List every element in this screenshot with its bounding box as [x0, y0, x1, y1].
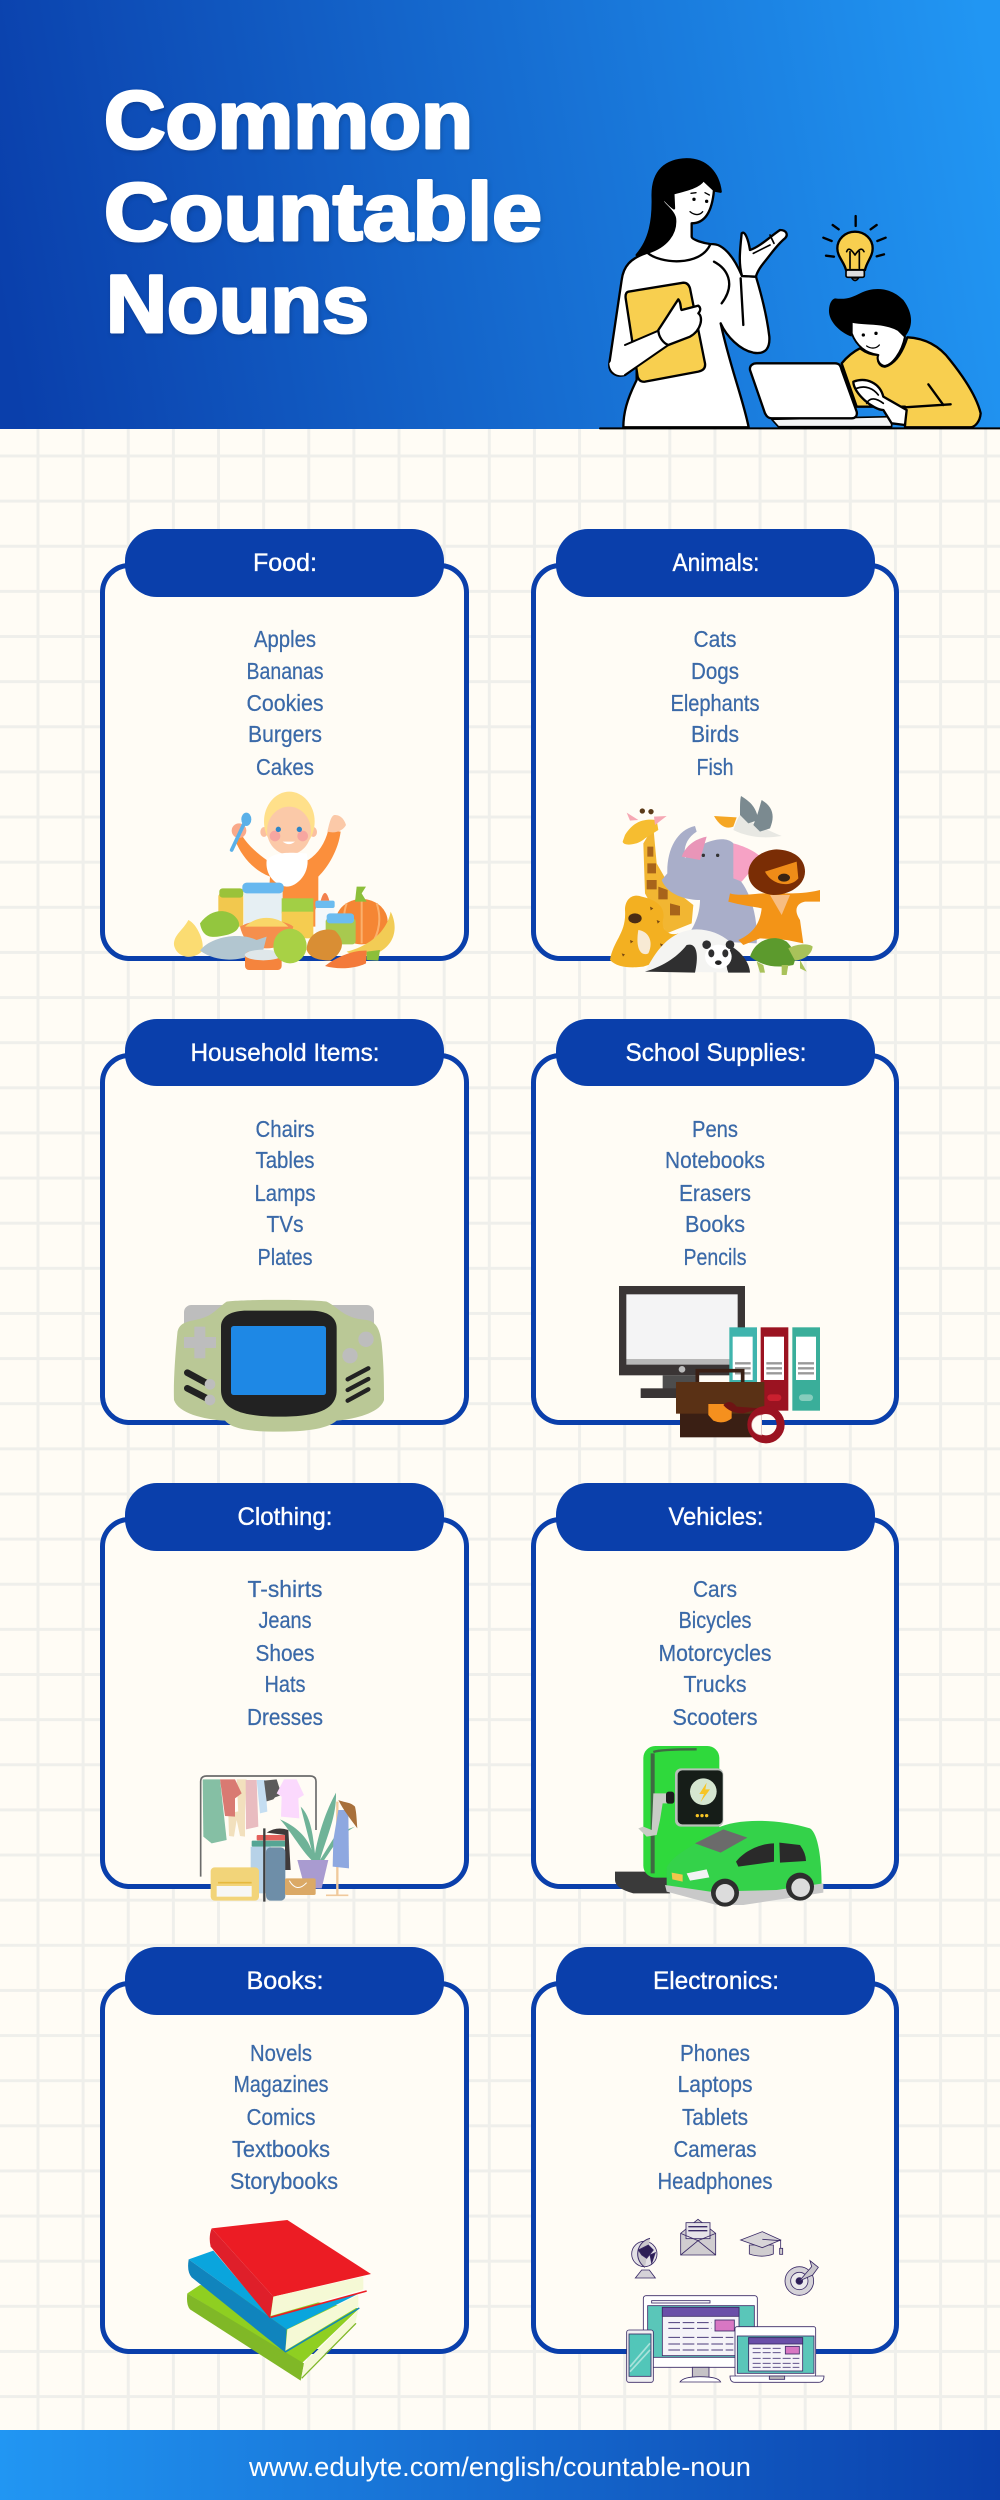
icon: handheld console [174, 1300, 384, 1432]
title: Common [104, 75, 473, 166]
list: electronics items [658, 2040, 772, 2194]
heading: Books: Books: [246, 1967, 324, 1995]
illustration: teacher and student with laptop [600, 159, 1000, 428]
heading: Food: Food: [253, 549, 317, 577]
list: animal items: Birds [691, 721, 739, 747]
list: electronics items: Headphones [658, 2168, 772, 2194]
icon: electric car and charger [615, 1746, 823, 1907]
panel: Electronics [534, 1947, 896, 2382]
list: household items: Chairs [256, 1116, 314, 1142]
list: vehicle items: Cars [693, 1576, 737, 1602]
title [104, 75, 542, 350]
list: school items: Pencils [684, 1244, 746, 1270]
list: food items: Bananas [246, 658, 324, 684]
list: book items: Magazines [234, 2071, 328, 2097]
footer bar [0, 2430, 1000, 2500]
list: clothing items [247, 1576, 323, 1730]
list: school items: Pens [692, 1116, 738, 1142]
list: household items [254, 1116, 316, 1270]
list: book items: Storybooks [230, 2168, 338, 2194]
list: book items: Novels [250, 2040, 312, 2066]
panel: Vehicles [534, 1483, 896, 1907]
footer link text: www.edulyte.com/english/countable-noun [248, 2452, 751, 2482]
icon: clothes rack and luggage [201, 1776, 357, 1902]
title: Nouns [106, 259, 369, 350]
list: school items: Books [685, 1211, 745, 1237]
heading: Animals [556, 529, 875, 597]
list: food items: Cakes [256, 754, 314, 780]
list: household items: Plates [258, 1244, 312, 1270]
list: book items: Comics [246, 2104, 316, 2130]
title: Countable [104, 167, 542, 258]
list: electronics items: Phones [680, 2040, 750, 2066]
list: animal items: Dogs [691, 658, 739, 684]
icon: group of animals [610, 796, 820, 975]
list: food items: Burgers [248, 721, 322, 747]
list: vehicle items: Trucks [684, 1671, 746, 1697]
heading: Electronics [556, 1947, 875, 2015]
list: food items: Apples [254, 626, 316, 652]
heading: Vehicles: Vehicles: [668, 1503, 764, 1531]
heading: Animals: Animals: [672, 549, 760, 577]
list: school items: Notebooks [665, 1147, 765, 1173]
list: vehicle items: Bicycles [678, 1607, 752, 1633]
list: vehicle items: Motorcycles [658, 1640, 772, 1666]
heading: Household Items [125, 1019, 444, 1086]
list: electronics items: Laptops [678, 2071, 752, 2097]
list: household items: TVs [266, 1211, 304, 1237]
panel: Food [102, 529, 466, 970]
list: clothing items: Dresses [247, 1704, 323, 1730]
list: clothing items: T-shirts [248, 1576, 322, 1602]
panel: School Supplies [534, 1019, 896, 1439]
panel: Animals [534, 529, 896, 975]
heading: Vehicles [556, 1483, 875, 1551]
list: vehicle items: Scooters [672, 1704, 758, 1730]
heading: Clothing: Clothing: [238, 1503, 332, 1531]
list: book items [230, 2040, 338, 2194]
icon: devices and education symbols [627, 2219, 824, 2382]
list: household items: Lamps [254, 1180, 316, 1206]
panel: Household Items [102, 1019, 466, 1432]
list: electronics items: Cameras [674, 2136, 756, 2162]
header banner [0, 0, 1000, 429]
heading: School Supplies [556, 1019, 875, 1086]
heading: Household Items: Household Items: [190, 1039, 380, 1067]
list: household items: Tables [256, 1147, 314, 1173]
icon: baby with food [174, 792, 395, 970]
panel: Clothing [102, 1483, 466, 1902]
panel: Books [102, 1947, 466, 2381]
heading: Clothing [125, 1483, 444, 1551]
list: clothing items: Jeans [258, 1607, 312, 1633]
heading: Books [125, 1947, 444, 2015]
list: animal items [670, 626, 760, 780]
list: animal items: Elephants [670, 690, 760, 716]
heading: Food [125, 529, 444, 597]
heading: Electronics: Electronics: [653, 1967, 779, 1995]
list: vehicle items [658, 1576, 772, 1730]
list: book items: Textbooks [232, 2136, 330, 2162]
list: animal items: Fish [696, 754, 734, 780]
heading: School Supplies: School Supplies: [626, 1039, 806, 1067]
list: animal items: Cats [694, 626, 736, 652]
list: school items: Erasers [679, 1180, 751, 1206]
list: school items [665, 1116, 765, 1270]
icon: monitor, binders and briefcase [619, 1286, 820, 1439]
list: food items [246, 626, 324, 780]
icon: stack of books [187, 2220, 371, 2381]
list: food items: Cookies [246, 690, 324, 716]
list: clothing items: Hats [264, 1671, 306, 1697]
list: clothing items: Shoes [256, 1640, 314, 1666]
list: electronics items: Tablets [682, 2104, 748, 2130]
